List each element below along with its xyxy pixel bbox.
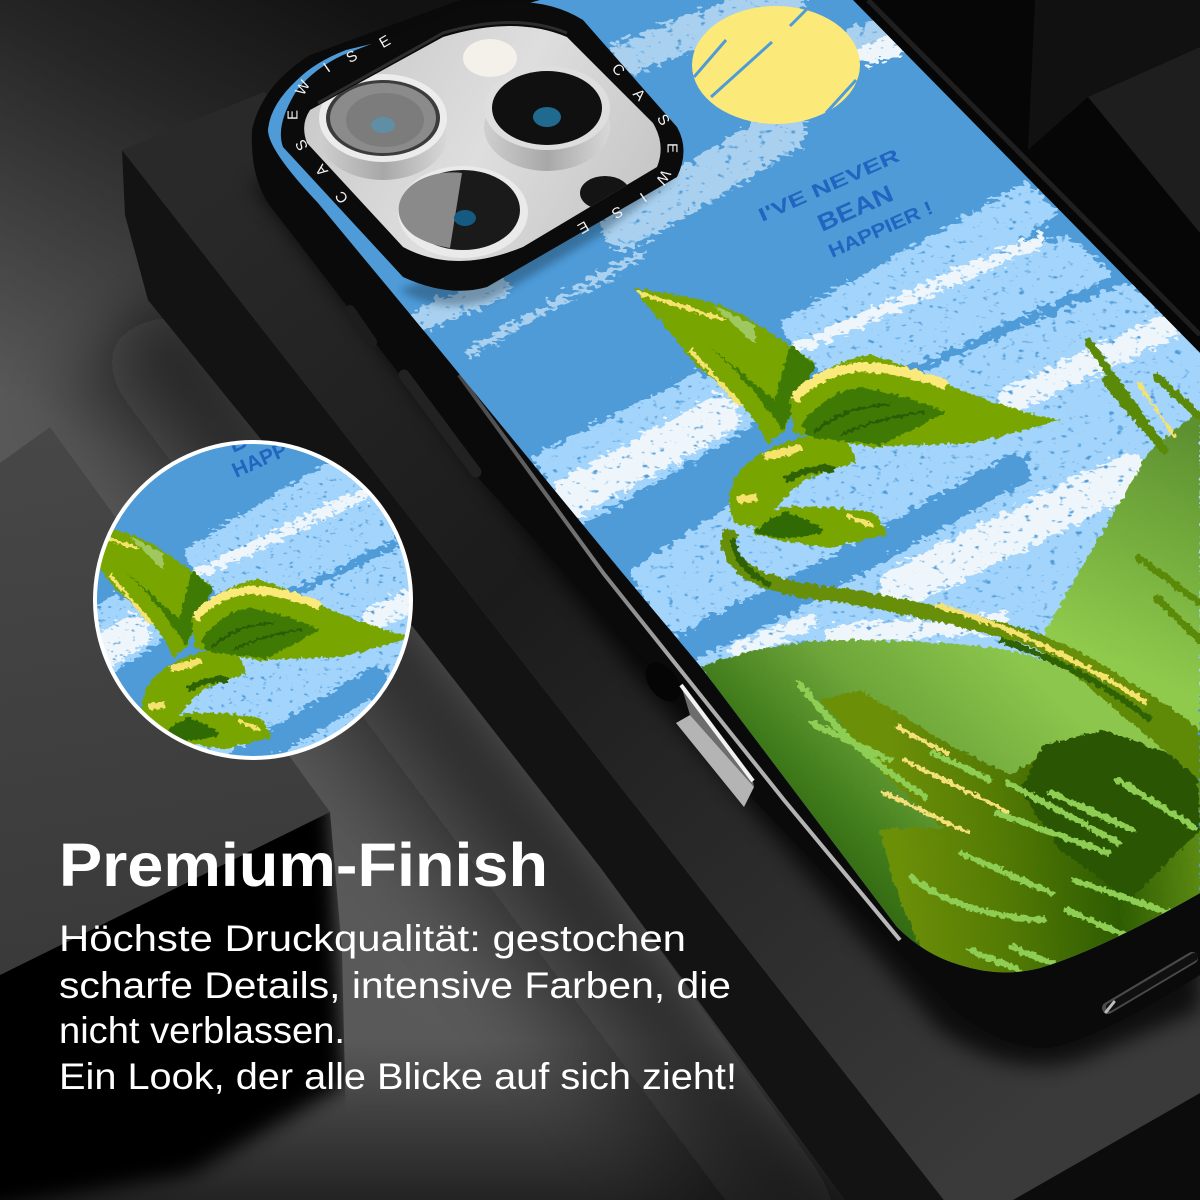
camera brand text left: S (343, 47, 361, 67)
sun (692, 6, 860, 124)
blue stripe through clouds (685, 470, 1015, 648)
top right small block (1088, 47, 1200, 233)
flash (463, 39, 517, 77)
case edge highlight (459, 375, 900, 940)
camera brand text right: A (629, 86, 649, 104)
button pocket (638, 656, 688, 708)
curl highlights (738, 448, 801, 500)
port (1106, 957, 1194, 1012)
lower leaf highlight (846, 515, 875, 527)
stem highlight (935, 605, 1147, 703)
shadow beside pedestal (0, 300, 860, 1200)
body text: Höchste Druckqualität: gestochen (59, 918, 686, 959)
side button: action (350, 310, 372, 342)
dark foliage (1020, 730, 1200, 900)
camera brand text right: S (608, 202, 626, 222)
right leaf dark (801, 387, 945, 445)
camera ring highlight (318, 22, 567, 103)
camera brand text left: C (332, 187, 352, 207)
camera brand text left: W (292, 77, 314, 98)
camera brand text right: S (653, 111, 673, 129)
lens 1 (319, 74, 447, 180)
camera module (281, 2, 684, 291)
button highlight (681, 685, 753, 781)
camera brand text left (284, 32, 394, 207)
white chalk streaks (570, 42, 1165, 650)
camera ring (281, 2, 684, 291)
left leaf pale patch (713, 305, 755, 345)
plant (633, 288, 1200, 780)
camera brand text right: E (664, 143, 680, 153)
stem (720, 528, 1129, 683)
right leaf (790, 355, 1060, 447)
floor lighting (0, 600, 900, 1200)
curl (729, 436, 857, 527)
camera brand text right: C (608, 60, 628, 80)
button side (681, 685, 754, 787)
magnifier circle (0, 263, 540, 1129)
lower leaf dark (755, 512, 825, 538)
art tagline (755, 145, 936, 263)
right leaf streaks (815, 405, 925, 435)
camera brand text left: E (376, 32, 394, 52)
button face (676, 715, 754, 807)
curl dark (785, 469, 835, 480)
camera plate (304, 26, 661, 261)
sensor (580, 176, 630, 210)
lens 2 (484, 66, 610, 171)
pedestal side face (122, 150, 944, 1200)
side button: volume (404, 375, 476, 472)
artwork (268, 0, 1200, 972)
camera brand text left: I (320, 60, 334, 76)
camera brand text right: I (636, 189, 650, 205)
phone case (252, 0, 1200, 1014)
art tagline: BEAN (813, 180, 898, 237)
lower leaf (753, 507, 888, 547)
body text (59, 918, 737, 1097)
magnified tagline: HAPP (229, 438, 291, 483)
grass strokes (799, 683, 1194, 970)
magnified artwork (0, 263, 540, 1129)
silver button (638, 656, 754, 807)
left leaf highlights (637, 292, 742, 407)
camera brand text left: E (284, 110, 302, 120)
case body (252, 0, 1200, 1048)
camera shadow (400, 175, 680, 306)
back hill grass (1088, 342, 1200, 640)
camera brand text right: W (652, 167, 674, 188)
magnified tagline: B (224, 427, 251, 458)
left leaf (633, 288, 816, 443)
lower left block dark face (0, 790, 345, 1200)
body text: nicht verblassen. (59, 1010, 345, 1051)
upper right case rim (868, 0, 1200, 335)
left leaf dark (698, 337, 816, 430)
dark wedge bottom right (1013, 1093, 1200, 1200)
body text: Ein Look, der alle Blicke auf sich zieht! (59, 1056, 737, 1097)
art tagline: HAPPIER ! (825, 198, 936, 263)
clouds (425, 0, 1200, 700)
magnifier ring (95, 442, 411, 758)
lens 3 (398, 166, 528, 258)
stem dark core (733, 540, 1150, 720)
camera brand text right (574, 60, 680, 237)
camera brand text right: E (574, 217, 592, 237)
art tagline: I'VE NEVER (755, 145, 903, 227)
back hill (1044, 410, 1200, 732)
pale clouds top (425, 0, 905, 352)
top right lighter panel (1028, 0, 1200, 150)
body text: scharfe Details, intensive Farben, die (59, 965, 731, 1006)
front hill (701, 640, 1200, 980)
light blue cloud bands (530, 182, 1200, 700)
sky (268, 0, 1200, 972)
lower left block top (0, 427, 330, 975)
phone shadow (250, 180, 1200, 1066)
right leaf highlight (794, 367, 946, 400)
stem end mass (1040, 650, 1200, 780)
camera brand text left: A (312, 161, 332, 179)
camera brand text left: S (292, 137, 312, 153)
heading: Premium-Finish (59, 831, 548, 899)
olive foliage (820, 690, 1200, 980)
top right dark area (853, 0, 1200, 400)
sun strokes (694, 8, 856, 113)
